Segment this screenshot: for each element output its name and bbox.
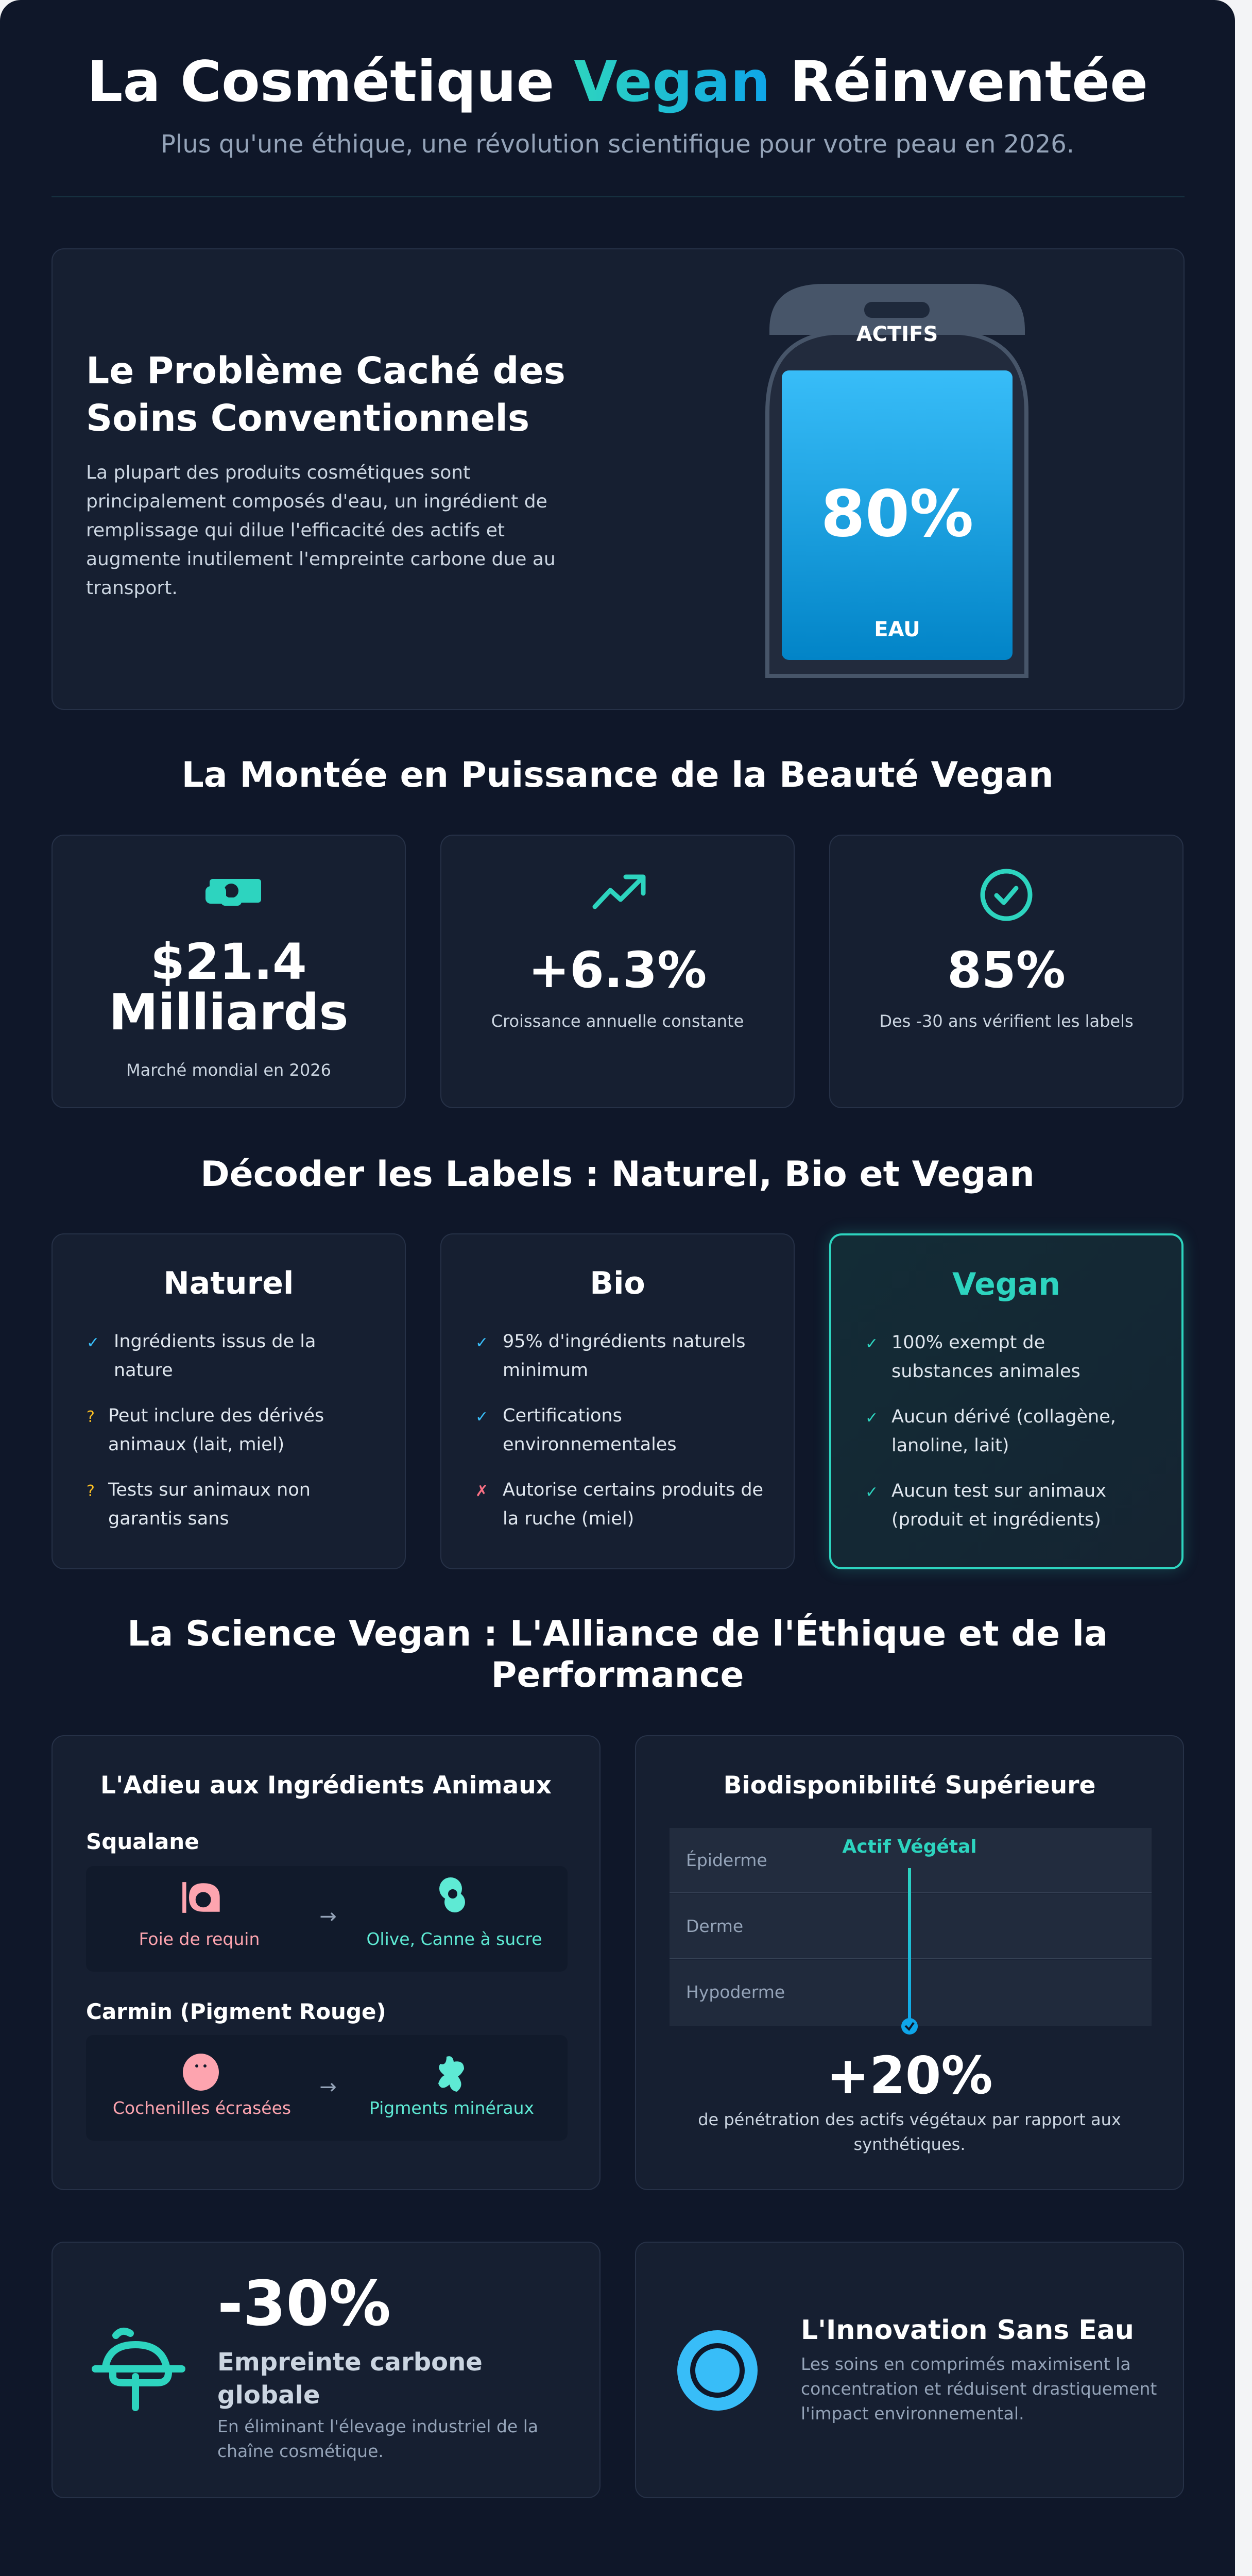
item: 100% exempt de substances animales xyxy=(891,1332,1081,1382)
label: market: Marché mondial en 2026 xyxy=(126,1060,331,1080)
panel: problem xyxy=(52,248,1185,710)
panel: carbon xyxy=(52,2242,601,2498)
label: Olive, Canne à sucre xyxy=(366,1929,542,1949)
heading: rise: La Montée en Puissance de la Beauté Vegan xyxy=(181,755,1054,795)
subheading: carmin: Carmin (Pigment Rouge) xyxy=(86,1999,386,2024)
label: Foie de requin xyxy=(139,1929,260,1949)
panel: vegan: ✓ xyxy=(865,1483,878,1501)
panel title: Biodisponibilité Supérieure xyxy=(724,1771,1095,1800)
value: market: $21.4 xyxy=(150,933,307,991)
item: Aucun dérivé (collagène, lanoline, lait) xyxy=(891,1406,1116,1456)
panel: bioavailability xyxy=(635,1735,1184,2190)
icon: trend xyxy=(592,875,646,909)
item: Autorise certains produits de la ruche (miel) xyxy=(503,1480,763,1529)
card title: naturel: Naturel xyxy=(164,1265,294,1301)
text: carbon title: globale xyxy=(217,2381,320,2410)
icon: cochineal xyxy=(183,2054,219,2091)
panel: vegan: ✓ xyxy=(865,1409,878,1427)
arrow: → xyxy=(319,2075,337,2099)
heading: labels: Décoder les Labels : Naturel, Bio et Vegan xyxy=(200,1154,1035,1195)
value: 85%: 85% xyxy=(947,941,1066,999)
label: actif vegetal: Actif Végétal xyxy=(842,1836,977,1857)
arrow: → xyxy=(319,1905,337,1928)
icon: bottle 80% water xyxy=(765,284,1028,678)
icon: bottle 80% water: EAU xyxy=(874,618,920,641)
icon: bottle 80% water: ACTIFS xyxy=(856,323,938,346)
panel: vegan: ✓ xyxy=(865,1335,878,1353)
item: Certifications environnementales xyxy=(503,1405,677,1455)
chart: skin layers: Hypoderme xyxy=(686,1982,785,2002)
panel: animal ingredients xyxy=(52,1735,601,2190)
icon: tablet xyxy=(677,2330,758,2411)
panel: naturel: ? xyxy=(87,1482,95,1500)
swap: carmin xyxy=(86,2035,568,2141)
text: problem body: La plupart des produits cosmétiques sont principalement composés d'eau, un ingrédient de remplissage qui dilue l'efficacité des actifs et augmente inutilement l'empreinte carbone due au transport. xyxy=(86,462,556,599)
text: waterless desc: Les soins en comprimés maximisent la concentration et réduisent drastiquement l'impact environnemental. xyxy=(801,2354,1157,2424)
text: penetration: de pénétration des actifs végétaux par rapport aux synthétiques. xyxy=(698,2110,1121,2154)
heading: science: Performance xyxy=(491,1655,744,1696)
title: La Cosmétique Vegan Réinventée xyxy=(87,49,1148,114)
card title: bio: Bio xyxy=(590,1265,645,1301)
value: market: Milliards xyxy=(109,984,349,1041)
icon: money xyxy=(205,879,261,906)
heading: problem xyxy=(86,349,565,439)
swap: squalane xyxy=(86,1866,568,1972)
panel: vegan xyxy=(829,1233,1184,1569)
icon: carbon xyxy=(92,2328,185,2411)
text: carbon title xyxy=(217,2348,483,2410)
item: Ingrédients issus de la nature xyxy=(114,1331,316,1381)
panel: bio: ✓ xyxy=(475,1334,488,1352)
card title: vegan: Vegan xyxy=(952,1266,1060,1302)
icon: mineral xyxy=(438,2056,464,2092)
heading: problem: Le Problème Caché des xyxy=(86,349,565,392)
item: Peut inclure des dérivés animaux (lait, miel) xyxy=(108,1405,324,1455)
panel: stat labels xyxy=(829,835,1184,1108)
chart: skin layers: Derme xyxy=(686,1916,743,1936)
heading: science: La Science Vegan : L'Alliance de l'Éthique et de la xyxy=(127,1614,1108,1654)
text: carbon title: Empreinte carbone xyxy=(217,2348,483,2377)
panel title: L'Adieu aux Ingrédients Animaux xyxy=(100,1771,552,1800)
chart: skin layers xyxy=(670,1828,1152,2035)
chart: skin layers: Épiderme xyxy=(686,1850,767,1870)
panel: bio: ✓ xyxy=(475,1408,488,1426)
icon: olive xyxy=(439,1877,465,1912)
label: growth: Croissance annuelle constante xyxy=(491,1011,744,1031)
value: +20%: +20% xyxy=(826,2045,993,2106)
item: 95% d'ingrédients naturels minimum xyxy=(503,1331,745,1381)
panel: naturel: ✓ xyxy=(87,1334,99,1352)
arrow: penetration xyxy=(901,1868,918,2035)
panel: naturel: ? xyxy=(87,1408,95,1426)
icon: shark liver xyxy=(182,1882,220,1913)
panel: waterless xyxy=(635,2242,1184,2498)
value: market xyxy=(109,933,349,1041)
panel: naturel xyxy=(52,1233,406,1569)
panel: bio xyxy=(440,1233,795,1569)
text: carbon desc: En éliminant l'élevage industriel de la chaîne cosmétique. xyxy=(217,2416,538,2461)
icon: bottle 80% water: 80% xyxy=(821,477,973,551)
panel: stat growth xyxy=(440,835,795,1108)
label: Pigments minéraux xyxy=(369,2098,534,2118)
value: growth: +6.3% xyxy=(528,941,707,999)
text: waterless title: L'Innovation Sans Eau xyxy=(801,2315,1134,2346)
value: -30%: -30% xyxy=(217,2268,391,2340)
heading: problem: Soins Conventionnels xyxy=(86,397,529,439)
item: Tests sur animaux non garantis sans xyxy=(108,1480,311,1529)
subheading: squalane: Squalane xyxy=(86,1829,199,1854)
icon: check circle xyxy=(981,869,1032,921)
panel: stat market xyxy=(52,835,406,1108)
label: Cochenilles écrasées xyxy=(113,2098,291,2118)
label: 85%: Des -30 ans vérifient les labels xyxy=(879,1011,1134,1031)
panel: bio: ✗ xyxy=(475,1482,488,1500)
item: Aucun test sur animaux (produit et ingrédients) xyxy=(891,1481,1106,1530)
heading: science xyxy=(127,1613,1108,1696)
subtitle: Plus qu'une éthique, une révolution scientifique pour votre peau en 2026. xyxy=(161,130,1074,159)
